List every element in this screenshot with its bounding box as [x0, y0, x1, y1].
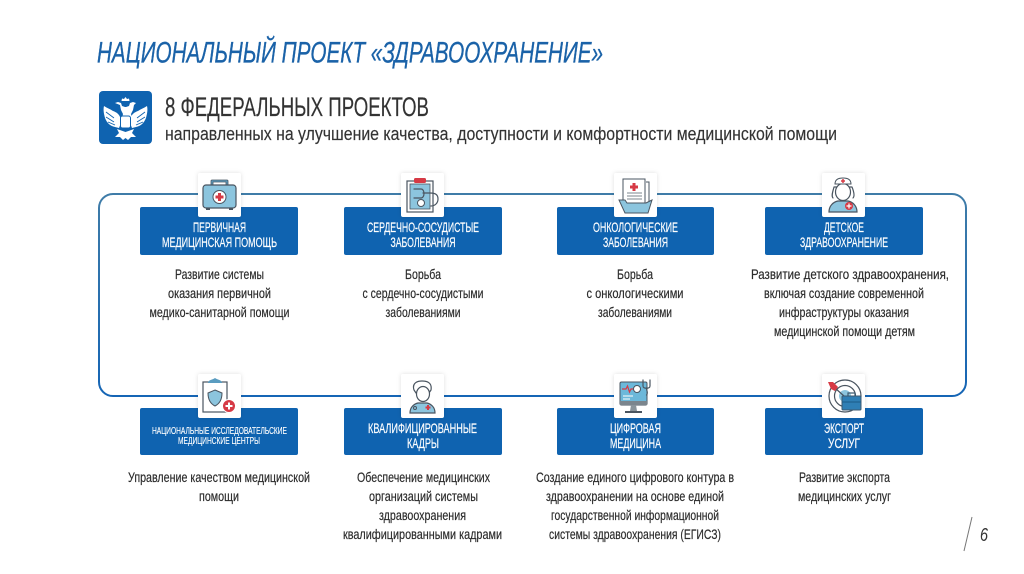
icon: clipboard stethoscope	[407, 178, 438, 212]
panel: cardiovascular: СЕРДЕЧНО-СОСУДИСТЫЕ	[367, 219, 479, 235]
description: Развитие системы	[175, 266, 264, 282]
description: включая создание современной	[764, 285, 924, 301]
description: Управление качеством медицинской	[128, 469, 310, 485]
panel: children's health	[751, 173, 949, 339]
page number: 6	[980, 525, 989, 545]
description: с онкологическими	[586, 285, 684, 301]
description: Борьба	[617, 266, 653, 282]
description: с сердечно-сосудистыми	[362, 285, 484, 301]
panel: qualified staff: КАДРЫ	[407, 435, 439, 451]
heading: 8 federal projects: 8 ФЕДЕРАЛЬНЫХ ПРОЕКТОВ	[165, 92, 429, 122]
panel: qualified staff: КВАЛИФИЦИРОВАННЫЕ	[368, 420, 477, 436]
panel: children's health: ДЕТСКОЕ	[824, 219, 864, 235]
panel: research centers	[128, 374, 310, 504]
panel: digital medicine: ЦИФРОВАЯ	[610, 420, 661, 436]
panel: digital medicine: МЕДИЦИНА	[610, 435, 661, 451]
description: оказания первичной	[168, 285, 271, 301]
description: организаций системы	[369, 488, 478, 504]
icon: ministry emblem	[99, 91, 152, 144]
description: инфраструктуры оказания	[779, 304, 909, 320]
page number	[964, 517, 989, 551]
description: квалифицированными кадрами	[343, 526, 502, 542]
panel: children's health: ЗДРАВООХРАНЕНИЕ	[800, 234, 888, 250]
icon: target and briefcase	[828, 380, 861, 412]
panel: primary care: ПЕРВИЧНАЯ	[193, 219, 246, 235]
panel: research centers: НАЦИОНАЛЬНЫЕ ИССЛЕДОВАТЕЛЬСКИЕ	[152, 426, 287, 437]
description	[150, 266, 290, 320]
description: помощи	[199, 488, 239, 504]
title: НАЦИОНАЛЬНЫЙ ПРОЕКТ «ЗДРАВООХРАНЕНИЕ»	[97, 36, 603, 70]
panel: research centers: МЕДИЦИНСКИЕ ЦЕНТРЫ	[178, 436, 260, 447]
description: системы здравоохранения (ЕГИСЗ)	[549, 526, 721, 542]
panel: export of services: ЭКСПОРТ	[824, 420, 864, 436]
description: заболеваниями	[598, 304, 672, 320]
panel: cardiovascular: ЗАБОЛЕВАНИЯ	[390, 234, 456, 250]
panel: oncology: ОНКОЛОГИЧЕСКИЕ	[593, 219, 678, 235]
description: медицинских услуг	[798, 488, 891, 504]
description: медицинской помощи детям	[774, 323, 915, 339]
subtitle: направленных на улучшение качества, доступности и комфортности медицинской помощи	[165, 124, 837, 144]
panel: primary care	[140, 173, 298, 320]
description: медико-санитарной помощи	[150, 304, 290, 320]
description: Развитие детского здравоохранения,	[751, 266, 949, 282]
panel: export of services: УСЛУГ	[828, 435, 860, 451]
description: государственной информационной	[551, 507, 719, 523]
panel: oncology: ЗАБОЛЕВАНИЯ	[603, 234, 668, 250]
description: Развитие экспорта	[799, 469, 890, 485]
description	[536, 469, 734, 542]
icon: clipboard shield	[203, 378, 236, 412]
description	[798, 469, 891, 504]
panel: oncology	[557, 173, 714, 320]
description: заболеваниями	[386, 304, 460, 320]
description	[751, 266, 949, 339]
description: Создание единого цифрового контура в	[536, 469, 734, 485]
icon: doctor	[410, 381, 435, 413]
icon: first aid kit	[203, 180, 236, 210]
description	[128, 469, 310, 504]
panel: qualified staff	[343, 374, 502, 542]
panel: cardiovascular	[344, 173, 502, 320]
description: здравоохранении на основе единой	[546, 488, 724, 504]
description	[343, 469, 502, 542]
panel: digital medicine	[536, 374, 734, 542]
frame connecting projects	[99, 194, 966, 396]
panel: primary care: МЕДИЦИНСКАЯ ПОМОЩЬ	[162, 234, 277, 250]
icon: monitor	[620, 380, 650, 412]
description	[362, 266, 484, 320]
icon: medical folder	[619, 179, 652, 213]
panel: export of services	[765, 374, 923, 504]
icon: nurse	[829, 178, 857, 212]
description	[586, 266, 684, 320]
description: здравоохранения	[379, 507, 466, 523]
description: Обеспечение медицинских	[357, 469, 490, 485]
description: Борьба	[405, 266, 441, 282]
